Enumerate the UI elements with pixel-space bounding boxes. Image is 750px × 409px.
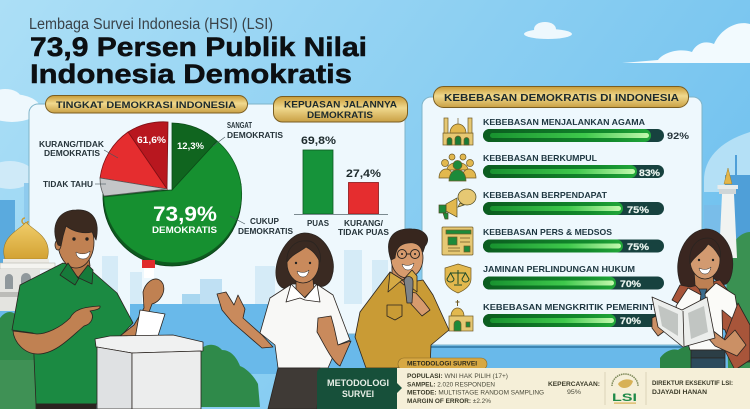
pie leader labels: DEMOKRATIS [238, 227, 294, 236]
panel: kebebasan demokratis [422, 86, 702, 347]
small pill heading [398, 358, 487, 370]
row: mengkritik pemerintah: 70% [620, 316, 642, 327]
row: pers dan medsos: KEBEBASAN PERS & MEDSOS [483, 227, 612, 237]
heading: subtitle: Lembaga Survei Indonesia (HSI) (LSI) [29, 16, 273, 33]
row: berkumpul [439, 153, 664, 181]
illustration: voter with green shirt [12, 210, 203, 409]
pie leader labels: SANGAT [227, 121, 252, 130]
confidence level: KEPERCAYAAN: [548, 381, 600, 388]
illustration: monument [718, 168, 738, 258]
row: menjalankan agama: 92% [667, 131, 690, 142]
bar chart: kepuasan [294, 135, 390, 237]
small pill heading: METODOLOGI SURVEI [407, 360, 477, 368]
illustration: man with gold shirt [355, 229, 449, 368]
slice: tidak tahu [100, 178, 167, 196]
dark green label [317, 368, 402, 409]
bar chart: kepuasan: 69,8% [301, 135, 336, 147]
illustration: bushes [0, 232, 750, 409]
ballot paper [135, 310, 165, 339]
pie chart [39, 121, 294, 266]
icon: shield with scales [445, 264, 471, 293]
row: perlindungan hukum: JAMINAN PERLINDUNGAN HUKUM [483, 264, 635, 274]
newspaper [652, 297, 715, 347]
confidence level [548, 381, 600, 396]
pill heading: tingkat demokrasi [46, 96, 248, 113]
decorative skyline [0, 155, 750, 273]
decorative clouds [0, 22, 750, 192]
dark green label: SURVEI [342, 389, 374, 400]
methodology details: SAMPEL: 2.020 RESPONDEN [407, 382, 495, 388]
bar chart: kepuasan: TIDAK PUAS [338, 228, 390, 237]
slice: kurang tidak demokratis [100, 132, 167, 189]
illustration: woman with white shirt [217, 233, 351, 409]
decorative lower blue band [0, 304, 750, 374]
heading: title: Indonesia Demokratis [30, 59, 352, 89]
row: pers dan medsos: 75% [627, 242, 650, 253]
icon: megaphone and speech bubble [439, 189, 476, 219]
raised arm and flag [120, 279, 164, 338]
bar chart: kepuasan: KURANG/ [344, 219, 384, 228]
pie values: 61,6% [137, 135, 166, 145]
row: pers dan medsos [442, 227, 664, 255]
row: menjalankan agama [443, 117, 690, 145]
neck and head [66, 250, 90, 278]
pie values: 73,9% [153, 202, 217, 226]
pie values: 12,3% [177, 141, 204, 151]
heading: title: 73,9 Persen Publik Nilai [30, 32, 367, 62]
pie leader labels: DEMOKRATIS [227, 131, 284, 140]
pie leader labels: KURANG/TIDAK [39, 140, 104, 149]
illustration: mosque [0, 218, 55, 311]
left arm and open hand [217, 292, 273, 348]
bar chart: kepuasan: PUAS [307, 219, 330, 228]
pill heading: tingkat demokrasi: TINGKAT DEMOKRASI INDONESIA [56, 100, 236, 111]
row: berpendapat: 75% [627, 205, 650, 216]
row: berpendapat: KEBEBASAN BERPENDAPAT [483, 190, 607, 200]
right arm and fist [317, 316, 351, 366]
decorative faint skyline [102, 250, 388, 306]
shirt [12, 263, 133, 404]
row: berpendapat [439, 189, 664, 219]
pill heading: kepuasan jalannya demokrasi: KEPUASAN JALANNYA [284, 100, 398, 110]
microphone [404, 276, 413, 303]
ballot box [95, 335, 203, 353]
pie leader labels [39, 121, 294, 236]
director [652, 380, 733, 396]
row: perlindungan hukum [445, 264, 664, 293]
methodology details: METODE: MULTISTAGE RANDOM SAMPLING [407, 390, 544, 396]
row: berkumpul: 83% [639, 168, 661, 179]
dark green label: METODOLOGI [327, 378, 389, 389]
bar chart: kepuasan: 27,4% [346, 168, 381, 180]
director: DJAYADI HANAN [652, 389, 707, 396]
row: berkumpul: KEBEBASAN BERKUMPUL [483, 153, 597, 163]
icon: mosque [443, 118, 473, 145]
pill heading: kebebasan demokratis [434, 86, 688, 108]
hand and forearm [410, 292, 430, 316]
pie leader labels: CUKUP [250, 217, 280, 226]
pointing arm [13, 306, 100, 354]
icon: church [449, 300, 473, 331]
slice: sangat demokratis [172, 123, 217, 190]
icon: crowd [439, 154, 476, 181]
row: mengkritik pemerintah [449, 300, 667, 331]
white shirt [260, 285, 350, 368]
pill heading: kepuasan jalannya demokrasi: DEMOKRATIS [307, 110, 373, 120]
row: menjalankan agama: KEBEBASAN MENJALANKAN AGAMA [483, 117, 645, 127]
methodology box [317, 358, 750, 409]
methodology details [407, 373, 544, 405]
row: mengkritik pemerintah: KEBEBASAN MENGKRITIK PEMERINTAH [483, 302, 667, 312]
confidence level: 95% [567, 389, 581, 396]
slice: cukup demokratis [104, 141, 242, 263]
illustration: student with newspaper [652, 229, 750, 370]
director: DIREKTUR EKSEKUTIF LSI: [652, 380, 733, 387]
heading: title [30, 32, 367, 89]
pie leader labels: DEMOKRATIS [44, 149, 101, 158]
methodology details: POPULASI: WNI HAK PILIH (17+) [407, 373, 508, 380]
icon: newspaper [442, 227, 473, 255]
slice: kurang demokratis dark [128, 122, 168, 189]
cream strip [397, 368, 750, 409]
logo: LSI: LSI [612, 392, 637, 404]
pill heading: kebebasan demokratis: KEBEBASAN DEMOKRATIS DI INDONESIA [444, 92, 679, 104]
logo: LSI [612, 374, 638, 404]
pie values: DEMOKRATIS [152, 225, 217, 235]
pie values [137, 135, 217, 235]
methodology details: MARGIN OF ERROR: ±2.2% [407, 398, 491, 405]
panel: tingkat demokrasi and kepuasan [29, 104, 405, 336]
pill heading: kepuasan jalannya demokrasi [274, 96, 408, 122]
pie leader labels: TIDAK TAHU [43, 180, 93, 189]
row: perlindungan hukum: 70% [620, 279, 642, 290]
